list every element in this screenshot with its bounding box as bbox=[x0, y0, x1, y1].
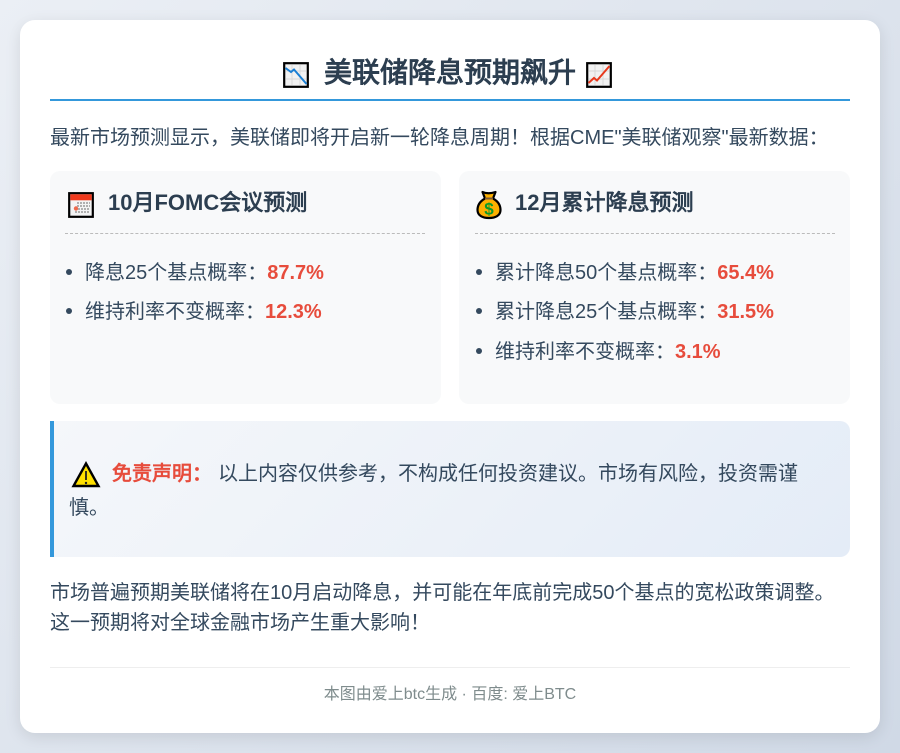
intro text: 最新市场预测显示，美联储即将开启新一轮降息周期！根据CME"美联储观察"最新数据： bbox=[50, 127, 829, 149]
panel heading: October: 10月FOMC会议预测 bbox=[108, 190, 307, 215]
panel: disclaimer bbox=[50, 421, 850, 557]
disclaimer text line 2: 慎。 bbox=[69, 497, 109, 519]
disclaimer text line 1: 以上内容仅供参考，不构成任何投资建议。市场有风险，投资需谨 bbox=[218, 463, 798, 485]
panel: October FOMC bbox=[50, 171, 441, 404]
icon: money bag bbox=[476, 190, 502, 220]
bullet bbox=[476, 348, 482, 354]
list item: 50bp: 累计降息50个基点概率：65.4% bbox=[495, 262, 774, 284]
conclusion text bbox=[50, 582, 834, 634]
icon: money bag: $ bbox=[484, 200, 494, 218]
bullet bbox=[66, 269, 72, 275]
disclaimer label: 免责声明： bbox=[112, 463, 212, 485]
bullet bbox=[476, 269, 482, 275]
panel heading: December: 12月累计降息预测 bbox=[515, 190, 693, 215]
footer divider bbox=[50, 667, 850, 668]
icon: chart decreasing bbox=[283, 62, 309, 88]
icon: warning bbox=[72, 461, 100, 488]
title underline bbox=[50, 99, 850, 101]
list item: 25bp: 累计降息25个基点概率：31.5% bbox=[495, 301, 774, 323]
list item: 25bp: 降息25个基点概率：87.7% bbox=[85, 262, 324, 284]
divider bbox=[65, 233, 425, 234]
panel: December cumulative bbox=[459, 171, 850, 404]
divider bbox=[475, 233, 835, 234]
conclusion text: 市场普遍预期美联储将在10月启动降息，并可能在年底前完成50个基点的宽松政策调整。 bbox=[50, 582, 834, 604]
bullet bbox=[476, 308, 482, 314]
conclusion text: 这一预期将对全球金融市场产生重大影响！ bbox=[50, 612, 430, 634]
list item: hold: 维持利率不变概率：3.1% bbox=[495, 341, 721, 363]
bullet bbox=[66, 308, 72, 314]
title text: 美联储降息预期飙升 bbox=[324, 57, 576, 88]
icon: chart increasing bbox=[586, 62, 612, 88]
footer: 本图由爱上btc生成 · 百度: 爱上BTC bbox=[324, 686, 576, 703]
list item: hold: 维持利率不变概率：12.3% bbox=[85, 301, 322, 323]
icon: calendar bbox=[68, 192, 94, 218]
title bbox=[283, 57, 612, 88]
